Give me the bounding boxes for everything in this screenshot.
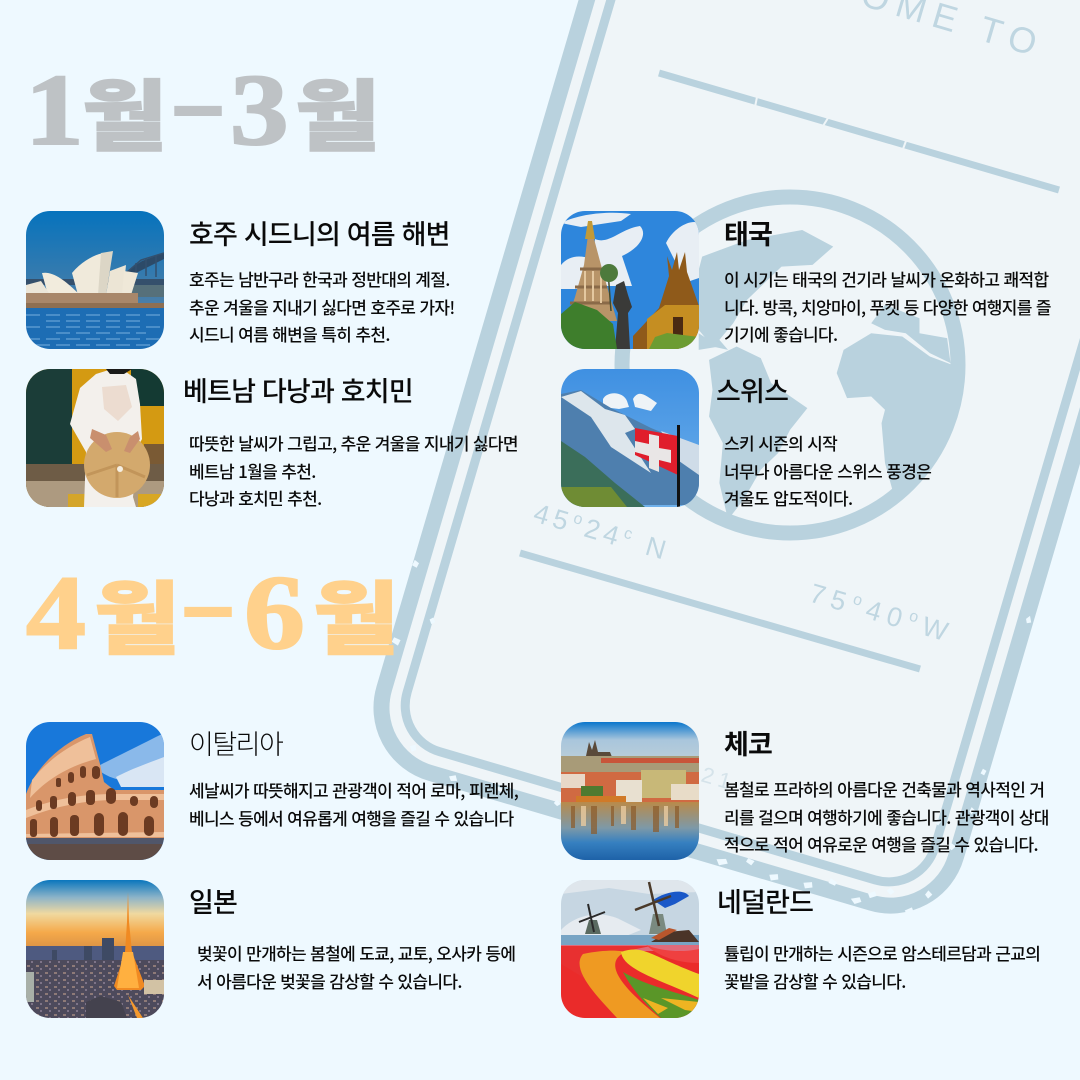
- heading: April to June: 월: [94, 555, 180, 670]
- heading: April to June: [26, 554, 399, 671]
- stamp text: latitude: o: [571, 510, 589, 530]
- description: [724, 430, 932, 510]
- photo: woman with conical hat: [26, 369, 164, 507]
- description: 적으로 적어 여유로운 여행을 즐길 수 있습니다.: [724, 831, 1038, 856]
- stamp background: [374, 0, 1080, 914]
- title: 호주 시드니의 여름 해변: [189, 213, 450, 252]
- stamp text: latitude: 24: [581, 513, 627, 553]
- stamp text: longitude: 40: [862, 594, 912, 635]
- title: 이탈리아: [189, 723, 282, 762]
- description: [189, 777, 518, 830]
- panel: Thailand: [561, 211, 1051, 349]
- panel: Vietnam: [26, 369, 518, 510]
- description: 겨울도 압도적이다.: [724, 485, 852, 510]
- description: 다낭과 호치민 추천.: [189, 485, 322, 510]
- heading: January to March: [25, 54, 380, 167]
- heading: April to June: 4: [26, 554, 86, 671]
- heading: April to June: -: [177, 558, 239, 653]
- description: [724, 776, 1049, 856]
- stamp text: date: 21: [699, 762, 739, 796]
- photo: Thai temples: [561, 211, 699, 349]
- stamp text: latitude: N: [631, 528, 674, 567]
- title: 네덜란드: [717, 881, 813, 920]
- description: 너무나 아름다운 스위스 풍경은: [724, 458, 931, 482]
- description: [724, 266, 1051, 346]
- heading: January to March: -: [167, 57, 229, 152]
- description: 튤립이 만개하는 시즌으로 암스테르담과 근교의: [724, 940, 1040, 965]
- description: [189, 266, 455, 346]
- stamp text: latitude: 45: [530, 498, 576, 538]
- heading: January to March: 월: [295, 56, 380, 167]
- panel: Switzerland: [561, 369, 932, 510]
- title: 체코: [724, 723, 772, 762]
- photo: Colosseum: [26, 722, 164, 860]
- stamp text: longitude: o: [907, 608, 927, 628]
- description: 봄철로 프라하의 아름다운 건축물과 역사적인 거: [724, 776, 1044, 801]
- stamp text: latitude: c: [622, 525, 639, 545]
- description: 베니스 등에서 여유롭게 여행을 즐길 수 있습니다: [189, 804, 513, 830]
- stamp frame: [355, 0, 1080, 932]
- description: 벚꽃이 만개하는 봄철에 도쿄, 교토, 오사카 등에: [197, 940, 515, 965]
- photo: Tokyo Tower: [26, 880, 164, 1018]
- globe: [622, 197, 988, 556]
- description: 서 아름다운 벚꽃을 감상할 수 있습니다.: [197, 968, 462, 992]
- description: [197, 940, 515, 992]
- description: 호주는 남반구라 한국과 정반대의 계절.: [189, 266, 450, 291]
- title: 스위스: [716, 370, 788, 409]
- description: 리를 걸으며 여행하기에 좋습니다. 관광객이 상대: [724, 804, 1049, 828]
- description: 따뜻한 날씨가 그립고, 추운 겨울을 지내기 싫다면: [189, 430, 518, 455]
- stamp text: longitude: W: [918, 611, 958, 649]
- stamp lines: [520, 73, 1059, 669]
- title: 일본: [189, 881, 237, 920]
- panel: Italy: [26, 722, 518, 860]
- photo: windmills and tulips: [561, 880, 699, 1018]
- photo: Swiss Alps and flag: [561, 369, 699, 507]
- description: 꽃밭을 감상할 수 있습니다.: [724, 968, 906, 992]
- description: [189, 430, 518, 510]
- photo: Prague: [561, 722, 699, 860]
- title: 베트남 다낭과 호치민: [183, 370, 413, 409]
- heading: April to June: 6: [244, 554, 305, 671]
- description: 베트남 1월을 추천.: [189, 458, 316, 482]
- panel: Sydney: [26, 211, 455, 349]
- stamp text: longitude: 75: [806, 578, 856, 619]
- heading: January to March: 1: [25, 54, 84, 167]
- heading: January to March: 월: [82, 56, 167, 167]
- photo: Sydney Opera House: [26, 211, 164, 349]
- description: 세날씨가 따뜻해지고 관광객이 적어 로마, 피렌체,: [189, 777, 518, 802]
- panel: Netherlands: [561, 880, 1040, 1018]
- title: 태국: [724, 213, 772, 252]
- description: 시드니 여름 해변을 특히 추천.: [189, 321, 390, 346]
- panel: Japan: [26, 880, 515, 1018]
- description: 기기에 좋습니다.: [724, 321, 837, 346]
- description: [724, 940, 1040, 992]
- panel: Czech: [561, 722, 1049, 860]
- description: 추운 겨울을 지내기 싫다면 호주로 가자!: [189, 294, 455, 318]
- description: 이 시기는 태국의 건기라 날씨가 온화하고 쾌적합: [724, 266, 1048, 291]
- stamp text: longitude: o: [851, 591, 871, 612]
- description: 니다. 방콕, 치앙마이, 푸켓 등 다양한 여행지를 즐: [724, 294, 1051, 318]
- description: 스키 시즌의 시작: [724, 430, 837, 455]
- heading: April to June: 월: [313, 555, 399, 670]
- heading: January to March: 3: [230, 54, 289, 167]
